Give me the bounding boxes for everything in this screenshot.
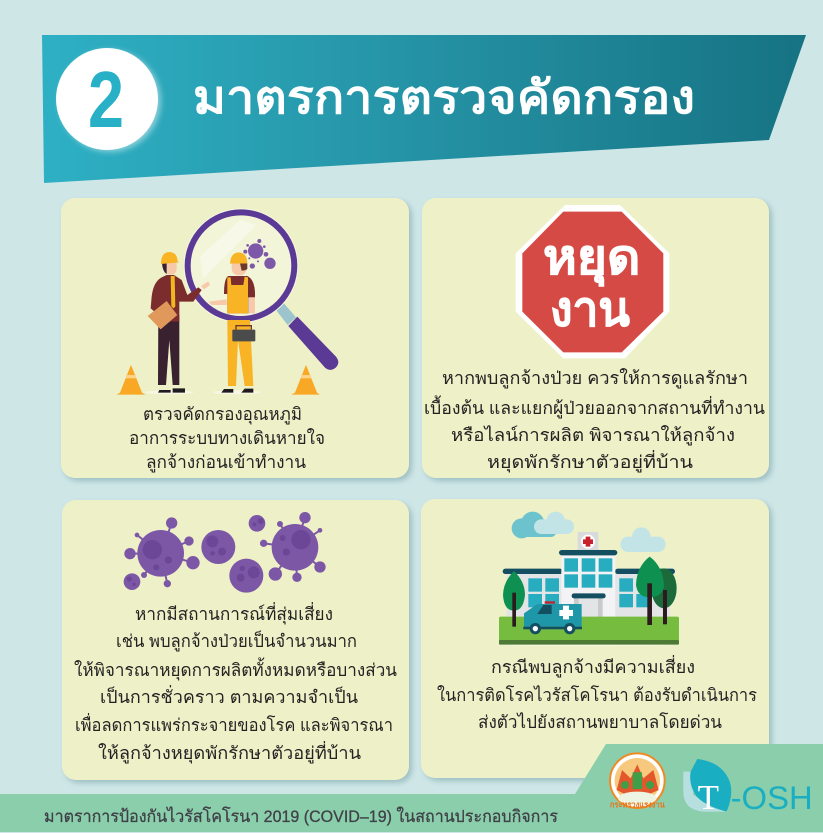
icon: stop sign: [516, 205, 669, 358]
header banner: [42, 35, 806, 183]
ambulance: [523, 601, 582, 634]
footer text: มาตราการป้องกันไวรัสโคโรนา 2019 (COVID–19) ในสถานประกอบกิจการ: [44, 806, 558, 826]
text: stop work description: [424, 368, 765, 473]
magnifier handle: [276, 303, 338, 370]
text: screening description: ลูกจ้างก่อนเข้าทำงาน: [146, 452, 306, 473]
text: screening description: อาการระบบทางเดินหายใจ: [129, 428, 325, 448]
text: referral description: ในการติดโรคไวรัสโคโรนา ต้องรับดำเนินการ: [437, 685, 757, 705]
text: risk description: เป็นการชั่วคราว ตามความจำเป็น: [100, 685, 358, 707]
logo: T-OSH: T: [698, 778, 719, 817]
trees: [503, 557, 677, 627]
text: risk description: เช่น พบลูกจ้างป่วยเป็นจำนวนมาก: [116, 630, 357, 652]
viruses in lens: [243, 239, 276, 269]
text: stop work description: หยุดพักรักษาตัวอยู่ที่บ้าน: [487, 450, 693, 473]
logo: T-OSH: -OSH: [731, 779, 813, 816]
text: stop work description: เบื้องต้น และแยกผู้ป่วยออกจากสถานที่ทำงาน: [424, 395, 765, 419]
panel: stop work: [422, 198, 769, 478]
panel: hospital referral: [421, 499, 769, 778]
text: referral description: กรณีพบลูกจ้างมีความเสี่ยง: [491, 655, 695, 678]
text: referral description: ส่งตัวไปยังสถานพยาบาลโดยด่วน: [478, 712, 722, 732]
number badge: [56, 48, 158, 150]
text: risk description: ให้ลูกจ้างหยุดพักรักษาตัวอยู่ที่บ้าน: [98, 741, 361, 764]
text: stop work description: หรือไลน์การผลิต พิจารณาให้ลูกจ้าง: [451, 425, 735, 446]
inspector: [148, 252, 210, 393]
number badge: 2: [88, 55, 124, 144]
icon: viruses: [124, 512, 326, 593]
text: screening description: ตรวจคัดกรองอุณหภูมิ: [143, 404, 302, 425]
panel: risky situation: [62, 500, 409, 780]
logo: ministry of labour seal: กระทรวงแรงงาน: [610, 800, 665, 810]
panel: temperature screening: [61, 198, 409, 478]
text: risk description: [74, 602, 397, 764]
title: มาตรการตรวจคัดกรอง: [193, 71, 695, 123]
logo: ministry of labour seal: [610, 753, 665, 810]
worker: [208, 252, 255, 393]
clouds: [512, 512, 666, 552]
illustration: inspector and worker under magnifier: [117, 209, 338, 395]
text: screening description: [129, 404, 325, 473]
icon: stop sign: งาน: [550, 284, 630, 337]
text: referral description: [437, 655, 757, 732]
text: stop work description: หากพบลูกจ้างป่วย ควรให้การดูแลรักษา: [442, 368, 748, 389]
text: risk description: เพื่อลดการแพร่กระจายของโรค และพิจารณา: [75, 713, 393, 735]
illustration: hospital and ambulance: [499, 512, 679, 646]
logo: T-OSH: [683, 759, 813, 817]
text: risk description: หากมีสถานการณ์ที่สุ่มเสี่ยง: [135, 602, 333, 625]
footer band: [0, 744, 823, 832]
text: risk description: ให้พิจารณาหยุดการผลิตทั้งหมดหรือบางส่วน: [74, 657, 397, 681]
icon: stop sign: หยุด: [543, 231, 640, 286]
